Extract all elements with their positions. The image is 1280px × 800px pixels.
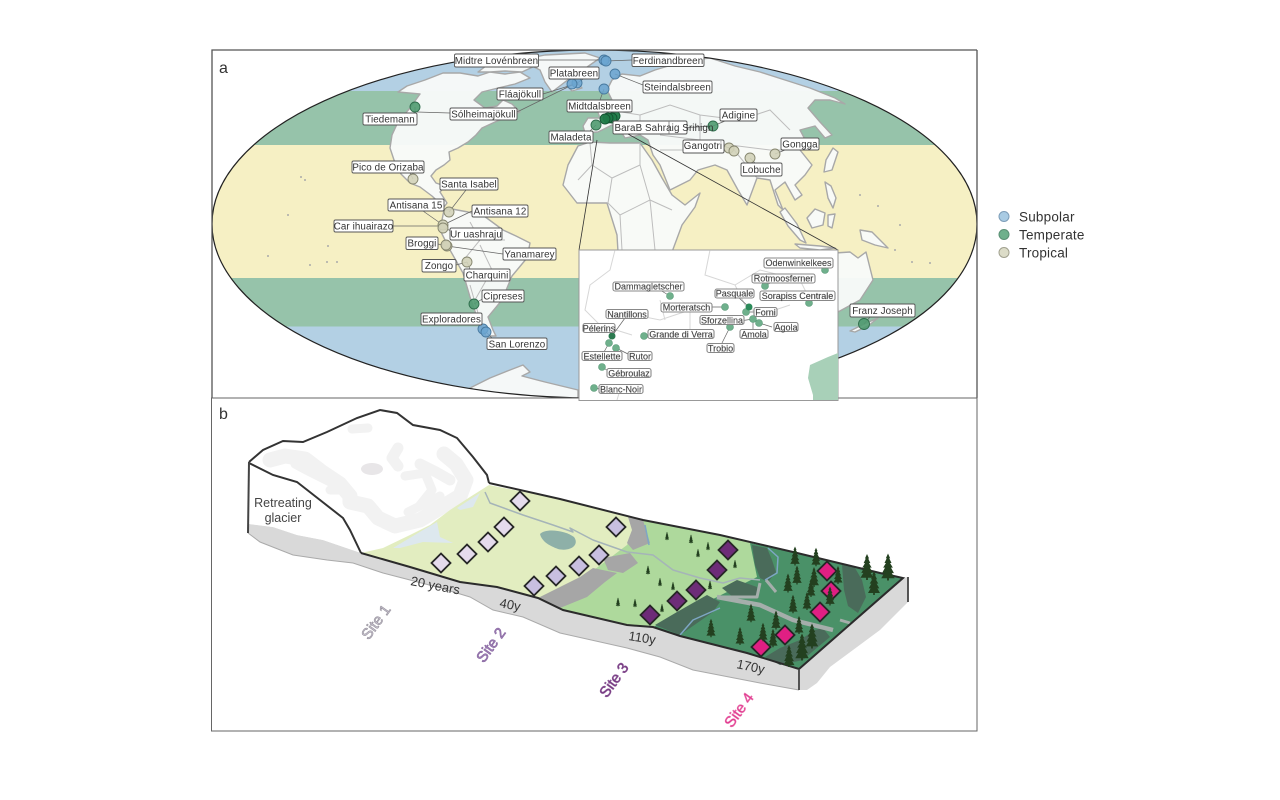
inset labels	[582, 258, 835, 394]
glacier label: Retreating	[254, 496, 312, 510]
front and side soil faces	[248, 524, 908, 690]
site 4 sampling plots	[752, 562, 840, 656]
block outline	[361, 483, 903, 669]
site labels: Exploradores	[422, 314, 481, 326]
inset labels: Rutor	[629, 352, 651, 362]
site labels: Platabreen	[550, 68, 598, 80]
site labels: Pico de Orizaba	[352, 162, 424, 174]
site labels: Midtdalsbreen	[568, 102, 631, 112]
site labels: Site 2	[473, 625, 510, 666]
inset labels: Pélerins	[583, 324, 616, 334]
leader lines	[393, 60, 870, 338]
site labels: Ur uashraju	[450, 230, 502, 240]
site labels: San Lorenzo	[489, 340, 546, 350]
map outline	[212, 50, 977, 398]
gravel outwash	[538, 517, 650, 608]
inset markers	[590, 266, 828, 392]
legend	[999, 210, 1085, 260]
inset labels: Forni	[755, 308, 776, 318]
small trees	[616, 532, 737, 612]
site labels: Site 1	[358, 602, 395, 643]
panel b: chronosequence block diagram	[212, 398, 977, 731]
site labels: Santa Isabel	[441, 180, 497, 190]
site labels: Lobuche	[742, 165, 781, 176]
dark wetland patches	[655, 545, 866, 665]
inset zoom lines	[579, 134, 838, 250]
age labels	[409, 573, 767, 677]
inset labels: Grande di Verra	[649, 330, 713, 340]
terrain zone: site 3	[538, 520, 760, 627]
panel a letter: a	[219, 60, 228, 77]
glacier	[248, 410, 489, 553]
site 1 sampling plots	[432, 492, 530, 572]
site labels: Midtre Lovénbreen	[455, 56, 538, 67]
inset: Alps site map	[579, 250, 838, 400]
infographic	[211, 49, 1084, 732]
meltwater pools and lake	[393, 493, 576, 550]
site labels: Cipreses	[483, 292, 523, 302]
site labels: Ferdinandbreen	[633, 56, 703, 67]
age labels: 110y	[628, 628, 657, 647]
site labels	[358, 602, 758, 731]
site labels: BaraB Sahraig Srihign	[614, 123, 714, 134]
inset labels: Nantillons	[607, 310, 647, 320]
terrain zone: sites 1 and 2	[361, 485, 650, 600]
inset labels: Morteratsch	[663, 302, 710, 312]
site labels: Adigine	[722, 110, 756, 122]
site labels: Gangotri	[684, 141, 722, 152]
site labels: Charquini	[466, 270, 508, 282]
inset labels: Rotmoosferner	[754, 274, 813, 284]
inset labels: Estellette	[583, 352, 621, 362]
inset labels: Agola	[774, 322, 798, 332]
site labels: Car ihuairazo	[334, 222, 394, 232]
site 3 sampling plots	[640, 540, 738, 624]
age labels: 40y	[498, 595, 522, 614]
site labels	[334, 54, 915, 350]
inset labels: Amola	[741, 330, 767, 340]
site labels: Maladeta	[550, 132, 592, 144]
glacier: glacier	[265, 511, 301, 525]
site labels: Broggi	[408, 238, 436, 250]
terrain zone: site 4	[653, 543, 903, 669]
site labels: Gongga	[782, 140, 818, 150]
inset labels: Blanc-Noir	[600, 384, 642, 394]
site labels: Antisana 12	[474, 206, 526, 218]
inset labels: Pasquale	[716, 288, 753, 298]
site markers	[408, 55, 870, 337]
site labels: Site 4	[721, 690, 758, 731]
site labels: Fláajökull	[499, 90, 541, 100]
inset labels: Sorapiss Centrale	[762, 291, 833, 301]
age labels: 170y	[735, 656, 767, 677]
legend: subpolar: Subpolar	[1019, 210, 1075, 224]
site labels: Sólheimajökull	[451, 110, 516, 120]
large conifers	[706, 546, 895, 667]
site labels: Site 3	[596, 660, 633, 701]
inset labels: Sforzellina	[701, 316, 743, 326]
site labels: Yanamarey	[504, 250, 555, 260]
site labels: Steindalsbreen	[644, 82, 711, 94]
inset labels: Dammagletscher	[614, 282, 683, 292]
panel a frame	[212, 50, 977, 398]
legend: tropical: Tropical	[1019, 246, 1068, 260]
site labels: Antisana 15	[390, 200, 443, 212]
streams	[485, 492, 850, 635]
map: climate bands and continents	[212, 40, 977, 402]
legend: temperate: Temperate	[1019, 228, 1085, 242]
site labels: Franz Joseph	[852, 306, 913, 317]
inset labels: Gébroulaz	[608, 368, 650, 378]
inset labels: Odenwinkelkees	[765, 258, 832, 268]
panel a: world map of glacier sites	[212, 40, 977, 402]
site labels: Zongo	[425, 261, 454, 272]
site 2 sampling plots	[524, 518, 626, 596]
inset leader lines	[594, 266, 825, 389]
panel b letter: b	[219, 406, 228, 423]
site labels: Tiedemann	[365, 114, 415, 126]
inset labels: Trobio	[708, 344, 733, 354]
age labels: 20 years	[409, 573, 462, 598]
